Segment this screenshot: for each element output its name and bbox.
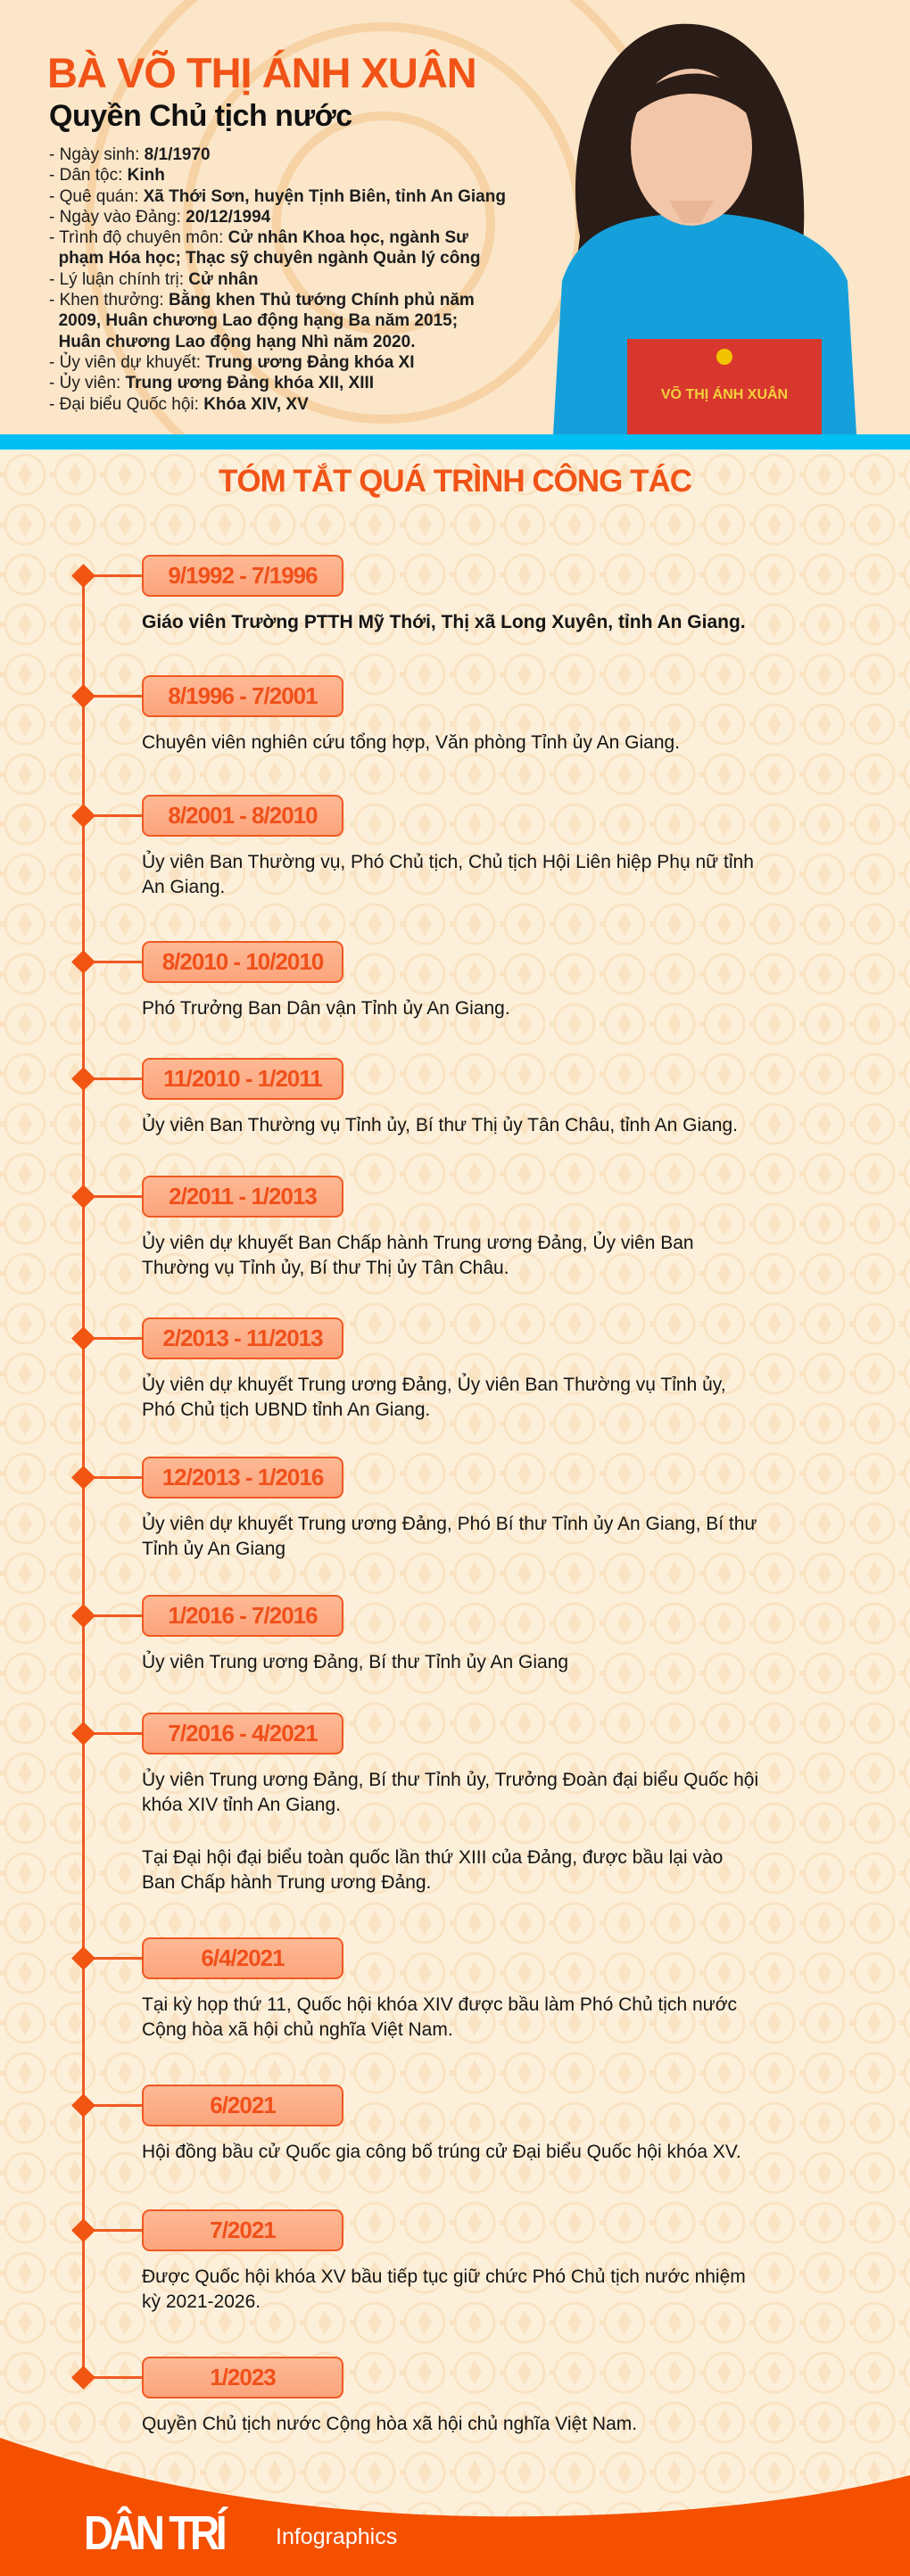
item 8 <box>71 1457 757 1559</box>
item 12 <box>71 2085 741 2162</box>
footer logo: DÂN TRÍ <box>84 2506 223 2560</box>
item 4: 8/2010 - 10/2010 <box>162 948 323 975</box>
timeline line <box>82 578 85 2378</box>
item 1: Giáo viên Trường PTTH Mỹ Thới, Thị xã Long Xuyên, tỉnh An Giang. <box>142 612 746 632</box>
item 2: Chuyên viên nghiên cứu tổng hợp, Văn phòng Tỉnh ủy An Giang. <box>142 732 680 753</box>
item 12: Hội đồng bầu cử Quốc gia công bố trúng cử Đại biểu Quốc hội khóa XV. <box>142 2142 741 2162</box>
info list: - Lý luận chính trị: Cử nhân <box>49 270 258 289</box>
item 2 <box>71 675 680 753</box>
item 13: 7/2021 <box>210 2217 276 2243</box>
item 1 <box>71 555 746 632</box>
info list: phạm Hóa học; Thạc sỹ chuyên ngành Quản lý công <box>59 249 481 268</box>
item 14 <box>71 2357 637 2434</box>
item 6: Thường vụ Tỉnh ủy, Bí thư Thị ủy Tân Châu. <box>142 1258 509 1278</box>
info list <box>49 145 506 414</box>
info list: - Đại biểu Quốc hội: Khóa XIV, XV <box>49 395 309 414</box>
item 3: Ủy viên Ban Thường vụ, Phó Chủ tịch, Chủ tịch Hội Liên hiệp Phụ nữ tỉnh <box>142 852 754 872</box>
item 10: 7/2016 - 4/2021 <box>168 1720 318 1746</box>
item 13: kỳ 2021-2026. <box>142 2291 261 2312</box>
item 11: 6/4/2021 <box>201 1944 285 1971</box>
item 8: Ủy viên dự khuyết Trung ương Đảng, Phó Bí thư Tỉnh ủy An Giang, Bí thư <box>142 1514 757 1534</box>
info list: - Quê quán: Xã Thới Sơn, huyện Tịnh Biên, tỉnh An Giang <box>49 187 506 206</box>
info list: - Ngày vào Đảng: 20/12/1994 <box>49 208 270 227</box>
info list: - Ủy viên dự khuyết: Trung ương Đảng khóa XI <box>49 353 415 372</box>
blue band <box>0 434 910 450</box>
item 7: 2/2013 - 11/2013 <box>162 1325 323 1351</box>
item 14: Quyền Chủ tịch nước Cộng hòa xã hội chủ nghĩa Việt Nam. <box>142 2414 637 2434</box>
footer logo: Infographics <box>276 2524 397 2549</box>
item 6: Ủy viên dự khuyết Ban Chấp hành Trung ương Đảng, Ủy viên Ban <box>142 1233 694 1253</box>
info list: 2009, Huân chương Lao động hạng Ba năm 2015; <box>59 311 458 330</box>
item 5: 11/2010 - 1/2011 <box>163 1065 322 1092</box>
item 1: 9/1992 - 7/1996 <box>168 562 318 589</box>
item 11: Cộng hòa xã hội chủ nghĩa Việt Nam. <box>142 2019 453 2040</box>
item 2: 8/1996 - 7/2001 <box>168 682 318 709</box>
item 10: Ủy viên Trung ương Đảng, Bí thư Tỉnh ủy, Trưởng Đoàn đại biểu Quốc hội <box>142 1770 758 1790</box>
section heading: TÓM TẮT QUÁ TRÌNH CÔNG TÁC <box>219 464 691 499</box>
info list: - Dân tộc: Kinh <box>49 166 165 185</box>
item 4: Phó Trưởng Ban Dân vận Tỉnh ủy An Giang. <box>142 998 510 1019</box>
item 13: Được Quốc hội khóa XV bầu tiếp tục giữ chức Phó Chủ tịch nước nhiệm <box>142 2266 746 2287</box>
info list: - Ngày sinh: 8/1/1970 <box>49 145 211 164</box>
item 9: Ủy viên Trung ương Đảng, Bí thư Tỉnh ủy An Giang <box>142 1652 568 1672</box>
item 9 <box>71 1595 568 1672</box>
item 9: 1/2016 - 7/2016 <box>168 1602 318 1629</box>
item 6: 2/2011 - 1/2013 <box>169 1183 317 1210</box>
item 8: Tỉnh ủy An Giang <box>142 1539 285 1559</box>
item 13 <box>71 2209 746 2312</box>
item 7: Ủy viên dự khuyết Trung ương Đảng, Ủy viên Ban Thường vụ Tỉnh ủy, <box>142 1375 726 1395</box>
item 12: 6/2021 <box>210 2092 276 2118</box>
footer wave <box>0 2438 910 2576</box>
title: BÀ VÕ THỊ ÁNH XUÂN <box>47 49 476 96</box>
portrait photo: VÕ THỊ ÁNH XUÂN <box>661 384 788 402</box>
item 3: An Giang. <box>142 877 225 897</box>
item 10 <box>71 1713 758 1893</box>
header background <box>0 0 910 434</box>
item 10: Tại Đại hội đại biểu toàn quốc lần thứ XIII của Đảng, được bầu lại vào <box>142 1847 723 1868</box>
item 11: Tại kỳ họp thứ 11, Quốc hội khóa XIV được bầu làm Phó Chủ tịch nước <box>142 1994 737 2015</box>
item 10: khóa XIV tỉnh An Giang. <box>142 1795 341 1815</box>
item 3: 8/2001 - 8/2010 <box>168 802 318 829</box>
item 10: Ban Chấp hành Trung ương Đảng. <box>142 1872 431 1893</box>
footer logo <box>84 2506 397 2560</box>
info list: - Trình độ chuyên môn: Cử nhân Khoa học, ngành Sư <box>49 228 468 247</box>
item 5: Ủy viên Ban Thường vụ Tỉnh ủy, Bí thư Thị ủy Tân Châu, tỉnh An Giang. <box>142 1115 738 1135</box>
info list: - Ủy viên: Trung ương Đảng khóa XII, XIII <box>49 374 374 392</box>
item 14: 1/2023 <box>210 2364 276 2390</box>
item 7 <box>71 1317 726 1420</box>
item 6 <box>71 1176 694 1278</box>
info list: - Khen thưởng: Bằng khen Thủ tướng Chính phủ năm <box>49 291 475 310</box>
item 11 <box>71 1937 737 2040</box>
subtitle: Quyền Chủ tịch nước <box>49 99 352 133</box>
info list: Huân chương Lao động hạng Nhì năm 2020. <box>59 333 415 351</box>
item 8: 12/2013 - 1/2016 <box>162 1464 323 1490</box>
item 5 <box>71 1058 738 1135</box>
item 7: Phó Chủ tịch UBND tỉnh An Giang. <box>142 1399 430 1420</box>
item 4 <box>71 941 510 1019</box>
item 3 <box>71 795 754 897</box>
portrait photo <box>553 23 856 434</box>
